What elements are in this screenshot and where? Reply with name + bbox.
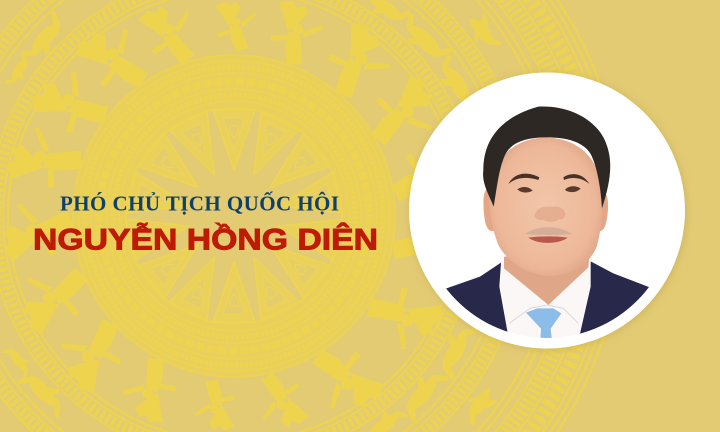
figure band: deer (2, 0, 483, 432)
eyes (517, 186, 581, 193)
white circle frame (409, 72, 685, 348)
tie (526, 308, 561, 347)
eyebrows (508, 174, 589, 184)
ears (483, 188, 608, 231)
neck (504, 257, 589, 305)
collar lines (509, 305, 578, 323)
title: name: NGUYỄN HỒNG DIÊN (33, 222, 378, 256)
portrait photo illustration (440, 107, 657, 347)
jacket right (580, 261, 649, 334)
portrait circle (409, 72, 685, 348)
star triangles (126, 110, 342, 322)
central drum disc (1, 0, 506, 432)
hair (483, 107, 610, 208)
moustache shade (525, 227, 572, 235)
disc rings (73, 55, 395, 377)
figure band: birds (457, 9, 506, 429)
face (489, 137, 602, 276)
shirt (500, 264, 590, 338)
jacket left (446, 262, 508, 332)
mouth (528, 236, 568, 243)
title: position: PHÓ CHỦ TỊCH QUỐC HỘI (60, 192, 339, 216)
nose (534, 207, 566, 222)
figure band: people (1, 0, 467, 432)
